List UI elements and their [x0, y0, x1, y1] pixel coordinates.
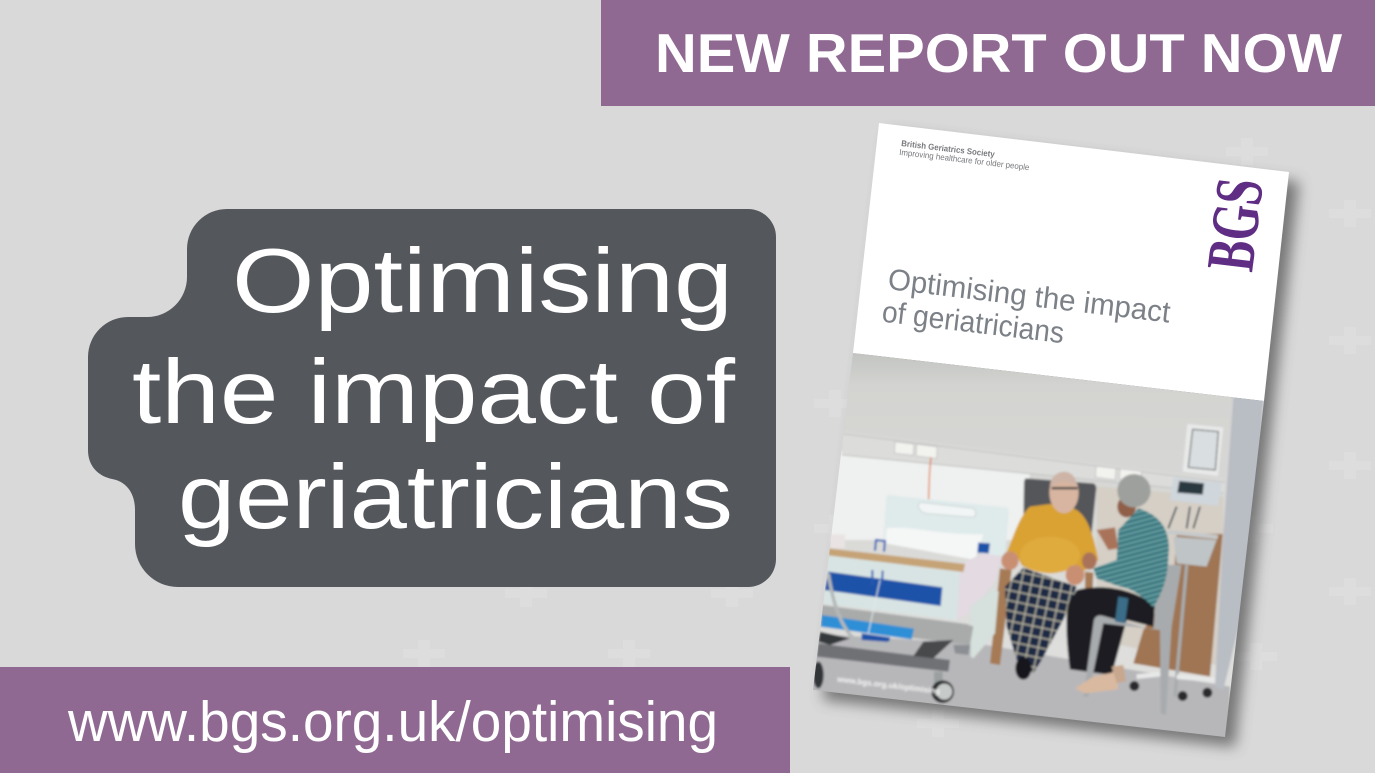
blue band: [825, 572, 942, 606]
man head: [1049, 472, 1079, 513]
bed side rail: [970, 588, 999, 658]
cover title: [880, 263, 1173, 362]
tablet: [1183, 424, 1223, 476]
BGS logo: BGS: [1191, 174, 1278, 275]
cover organisation text: Improving healthcare for older people: [899, 147, 1030, 172]
title text: [132, 231, 736, 548]
cabinet: [1133, 533, 1223, 677]
cover title: of geriatricians: [880, 296, 1066, 350]
cover organisation text: British Geriatrics Society: [901, 138, 996, 159]
vitals monitor: [1170, 477, 1222, 506]
wall frame: [830, 534, 845, 548]
blue clips: [872, 540, 885, 585]
photo scene: [813, 353, 1264, 737]
man trousers: [1005, 568, 1077, 673]
stand: [1167, 530, 1218, 539]
woman cardigan: [1093, 508, 1169, 607]
bed foot panel: [825, 556, 958, 608]
orange cable: [928, 457, 931, 515]
woman shoes: [1075, 672, 1118, 693]
woman trousers: [1067, 587, 1155, 675]
bed headboard: [883, 495, 1009, 557]
banner: new report out now: [601, 0, 1375, 106]
banner: website url: www.bgs.org.uk/optimising: [67, 690, 718, 754]
cover organisation text: [899, 138, 1031, 172]
cover photo: [813, 353, 1264, 737]
cover white top: [853, 123, 1289, 401]
wheels: [934, 671, 944, 684]
cover url: www.bgs.org.uk/optimising: [836, 675, 941, 696]
report cover: [790, 123, 1299, 767]
mattress sheet: [961, 555, 1000, 583]
bed frame: [820, 605, 973, 645]
visitor chair: [1083, 565, 1182, 715]
man jumper: [1005, 504, 1098, 572]
sockets: [894, 442, 1142, 480]
cover shadow: [823, 133, 1299, 747]
floor: [813, 634, 1230, 737]
title text: the impact of: [132, 342, 736, 443]
man hands: [1001, 551, 1019, 570]
banner: website url: [0, 667, 790, 773]
pillow: [885, 528, 983, 560]
armchair: [1023, 478, 1096, 533]
banner: new report out now: NEW REPORT OUT NOW: [655, 22, 1342, 84]
title panel: [88, 209, 776, 587]
background plus pattern: [403, 76, 1371, 737]
woman head: [1117, 496, 1136, 517]
cover title: Optimising the impact: [886, 263, 1173, 330]
woman hands: [1097, 527, 1118, 550]
curtain: [1215, 397, 1263, 690]
title text: Optimising: [232, 231, 733, 332]
table: [828, 548, 965, 572]
title text: geriatricians: [178, 447, 733, 548]
